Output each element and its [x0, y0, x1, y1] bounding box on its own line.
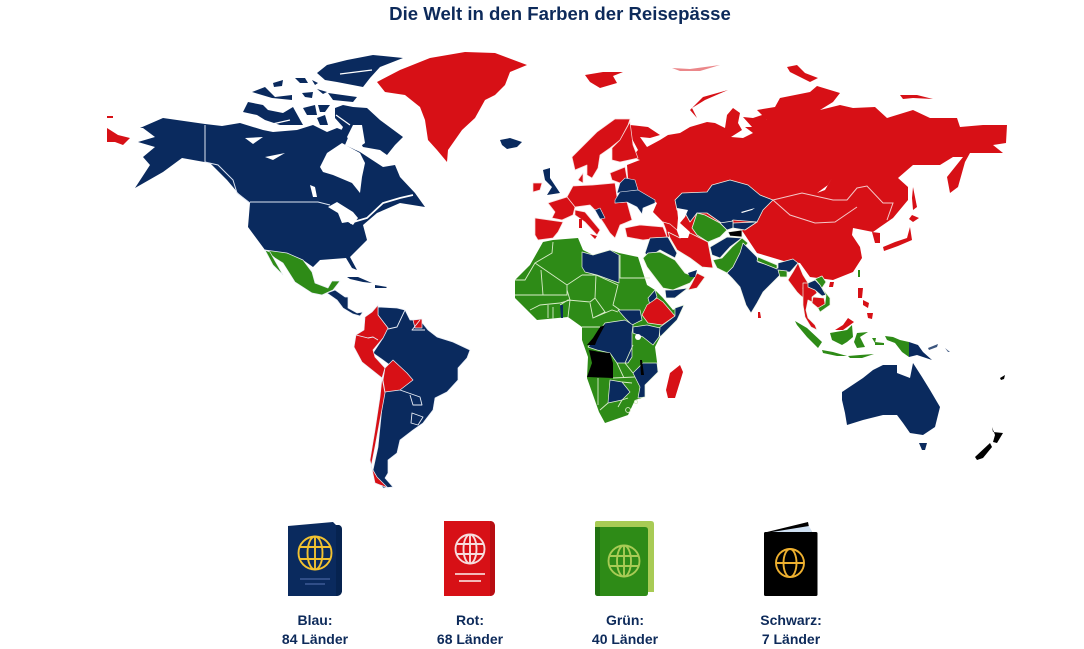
region: South and Southeast Asia — [727, 243, 932, 360]
region: Oceania — [842, 344, 1005, 460]
icon: black passport — [764, 522, 818, 596]
region: Africa — [515, 238, 684, 423]
label: Grün: Grün: — [606, 612, 644, 628]
title: Die Welt in den Farben der Reisepässe — [389, 3, 731, 24]
Sakhalin, Japan, Korea — [912, 187, 917, 210]
region: Latin America — [265, 250, 470, 488]
region: Greenland and Chukotka — [107, 52, 527, 162]
icon: green passport — [595, 521, 654, 596]
legend: green passport — [592, 521, 658, 647]
legend: red passport — [437, 521, 503, 647]
legend: black passport — [760, 522, 822, 647]
label: Rot: 68 Länder — [437, 631, 503, 647]
label: Grün — [592, 612, 658, 647]
label: Blau — [282, 612, 348, 647]
icon: red passport — [444, 521, 495, 596]
label: Rot: Rot: — [456, 612, 484, 628]
icon: blue passport — [288, 522, 342, 596]
Caspian and Balkhash — [677, 208, 690, 238]
label: Schwarz: 7 Länder — [762, 631, 820, 647]
label: Rot — [437, 612, 503, 647]
label: Blau: Blau: — [298, 612, 332, 628]
label: Grün: 40 Länder — [592, 631, 658, 647]
cutouts: Hudson Bay, Foxe Basin and lakes — [245, 125, 365, 225]
legend: blue passport — [282, 522, 348, 647]
label: Schwarz — [760, 612, 822, 647]
region: Europe — [533, 119, 680, 240]
region: Blue Europe and Iceland — [500, 138, 655, 219]
label: Blau: 84 Länder — [282, 631, 348, 647]
region: North America — [135, 55, 425, 270]
region: Central Asia and Middle East — [643, 180, 773, 298]
arctic islands — [585, 72, 623, 88]
countries on Africa — [560, 250, 684, 403]
region: Russia, China, Mongolia — [585, 65, 1007, 287]
label: Schwarz: Schwarz: — [760, 612, 822, 628]
